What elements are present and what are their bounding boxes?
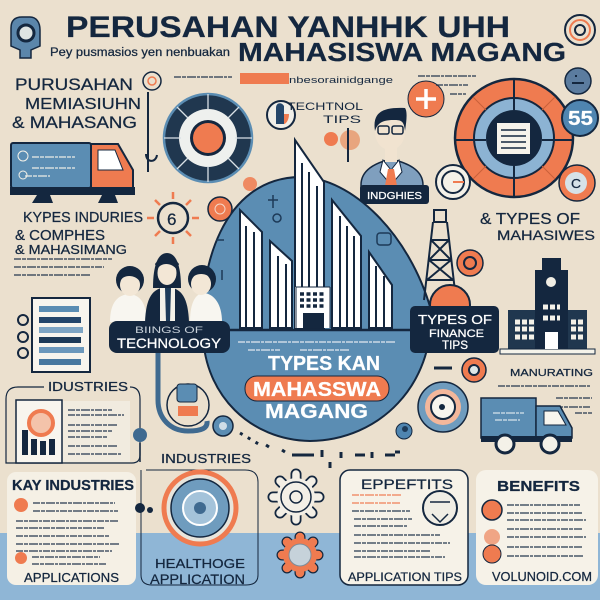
heading: technology tips: TECHTNOL (287, 101, 363, 113)
label: industries (360, 185, 429, 204)
panel: kay industries card: APPLICATIONS (24, 570, 119, 585)
heading: types of mahasiswes (480, 211, 595, 243)
dotted connector (240, 433, 262, 446)
heading: idustries: IDUSTRIES (48, 380, 128, 394)
icon: head logo (11, 17, 40, 58)
icon: small head circle (267, 101, 295, 129)
label: technology: BIINGS OF (135, 325, 203, 336)
heading: left top: PURUSAHAN (15, 75, 133, 94)
label: industries: INDGHIES (367, 190, 422, 202)
label: finance tips: FINANCE (429, 328, 484, 340)
tower base with windows and door (296, 287, 330, 328)
panel: industries chart card (6, 387, 140, 463)
small strip text and orange pill: nbesorainidgange (289, 75, 393, 85)
title: MAHASISWA MAGANG (238, 37, 566, 67)
panel: benefits card: BENEFITS (497, 478, 580, 495)
icon: orange circle (430, 285, 470, 325)
icon: sun six (147, 192, 199, 244)
icon: target top right (565, 15, 595, 45)
small icons in dome (216, 195, 391, 280)
icon: C badge right (559, 165, 595, 201)
icon: blue truck (481, 398, 572, 453)
heading: manufacturing: MANURATING (510, 367, 593, 379)
heading: technology tips (287, 101, 363, 126)
icon: orange dot (208, 197, 232, 221)
chart: dial wheel (164, 94, 252, 182)
badge: 55 (562, 100, 598, 136)
icon: ring target (434, 358, 486, 382)
checklist card (18, 298, 90, 372)
heading: types kan: TYPES KAN (268, 353, 380, 375)
label: finance tips (410, 306, 499, 353)
big blue circle (202, 177, 431, 441)
text lines (498, 386, 592, 413)
blue connector tube (158, 353, 207, 431)
badge: 55: 55 (568, 108, 593, 130)
panel: benefits tips card: EPPEFTITS (361, 476, 453, 492)
icon: orange truck (10, 143, 135, 203)
label: technology (109, 321, 230, 353)
icon: sun six: 6 (167, 210, 176, 229)
text lines (14, 259, 112, 275)
panel: benefits tips card: APPLICATION TIPS (348, 570, 462, 584)
subtitle: Pey pusmasios yen nenbuakan (50, 47, 230, 59)
small strip text and orange pill (174, 73, 393, 85)
heading: kypes industries: KYPES INDURIES (23, 209, 143, 226)
heading: kypes industries: & COMPHES (15, 227, 105, 244)
buildings skyline (240, 140, 392, 328)
title: PERUSAHAN YANHHK UHH (66, 11, 510, 44)
heading: kypes industries (15, 209, 143, 257)
panel: healthcare application: APPLICATION (150, 571, 245, 587)
icon: balloon (324, 128, 360, 162)
panel: kay industries card: KAY INDUSTRIES (12, 478, 134, 494)
label: technology: TECHNOLOGY (117, 335, 222, 351)
chart: orange ring with document (455, 79, 573, 197)
panel: kay industries card (7, 472, 136, 585)
panel: benefits tips card (340, 470, 468, 585)
icon: C badge right: C (571, 176, 581, 191)
panel: healthcare application: INDUSTRIES (161, 451, 251, 466)
bottom blue band (0, 533, 600, 600)
icon: blue dot (213, 416, 233, 436)
heading: left top: & MAHASANG (12, 113, 137, 132)
icon: ring with keyhole (418, 382, 468, 432)
icon: hook (143, 72, 161, 172)
heading: types of mahasiswes: MAHASIWES (497, 227, 595, 243)
circle text lines (238, 342, 396, 350)
heading: types of mahasiswes: & TYPES OF (480, 211, 580, 228)
heading: left top (12, 75, 141, 132)
heading: technology tips: TIPS (323, 114, 361, 126)
small text lines (418, 76, 476, 94)
icon: outline gear (273, 474, 319, 520)
heading: kypes industries: & MAHASIMANG (15, 243, 127, 257)
icon: small orange dot (243, 177, 257, 191)
icon: blue dot (396, 423, 412, 439)
people trio (110, 253, 222, 322)
icon: orange small ring (457, 250, 483, 276)
orange pill: mahasswa: MAHASSWA (253, 379, 381, 401)
circle top divider (225, 329, 410, 331)
icon: plus circle (408, 81, 444, 117)
icon: calculator (167, 384, 209, 426)
panel: healthcare application (141, 451, 258, 587)
icon: C badge left (436, 165, 470, 199)
label: finance tips: TYPES OF (418, 312, 492, 327)
icon: oil derrick (424, 210, 456, 300)
label: finance tips: TIPS (442, 338, 468, 352)
connector dots (133, 428, 153, 513)
person: man with tie (361, 108, 423, 190)
icon: factory building (500, 258, 595, 354)
icon: orange gear (282, 537, 318, 573)
panel: benefits card: VOLUNOID.COM (492, 570, 592, 584)
icon: face (565, 68, 591, 94)
heading: magang: MAGANG (265, 401, 368, 423)
title (66, 11, 566, 67)
panel: benefits card (476, 470, 598, 585)
panel: healthcare application: HEALTHOGE (155, 556, 245, 571)
dark scatter marks (266, 445, 400, 468)
heading: left top: MEMIASIUHN (25, 96, 141, 113)
